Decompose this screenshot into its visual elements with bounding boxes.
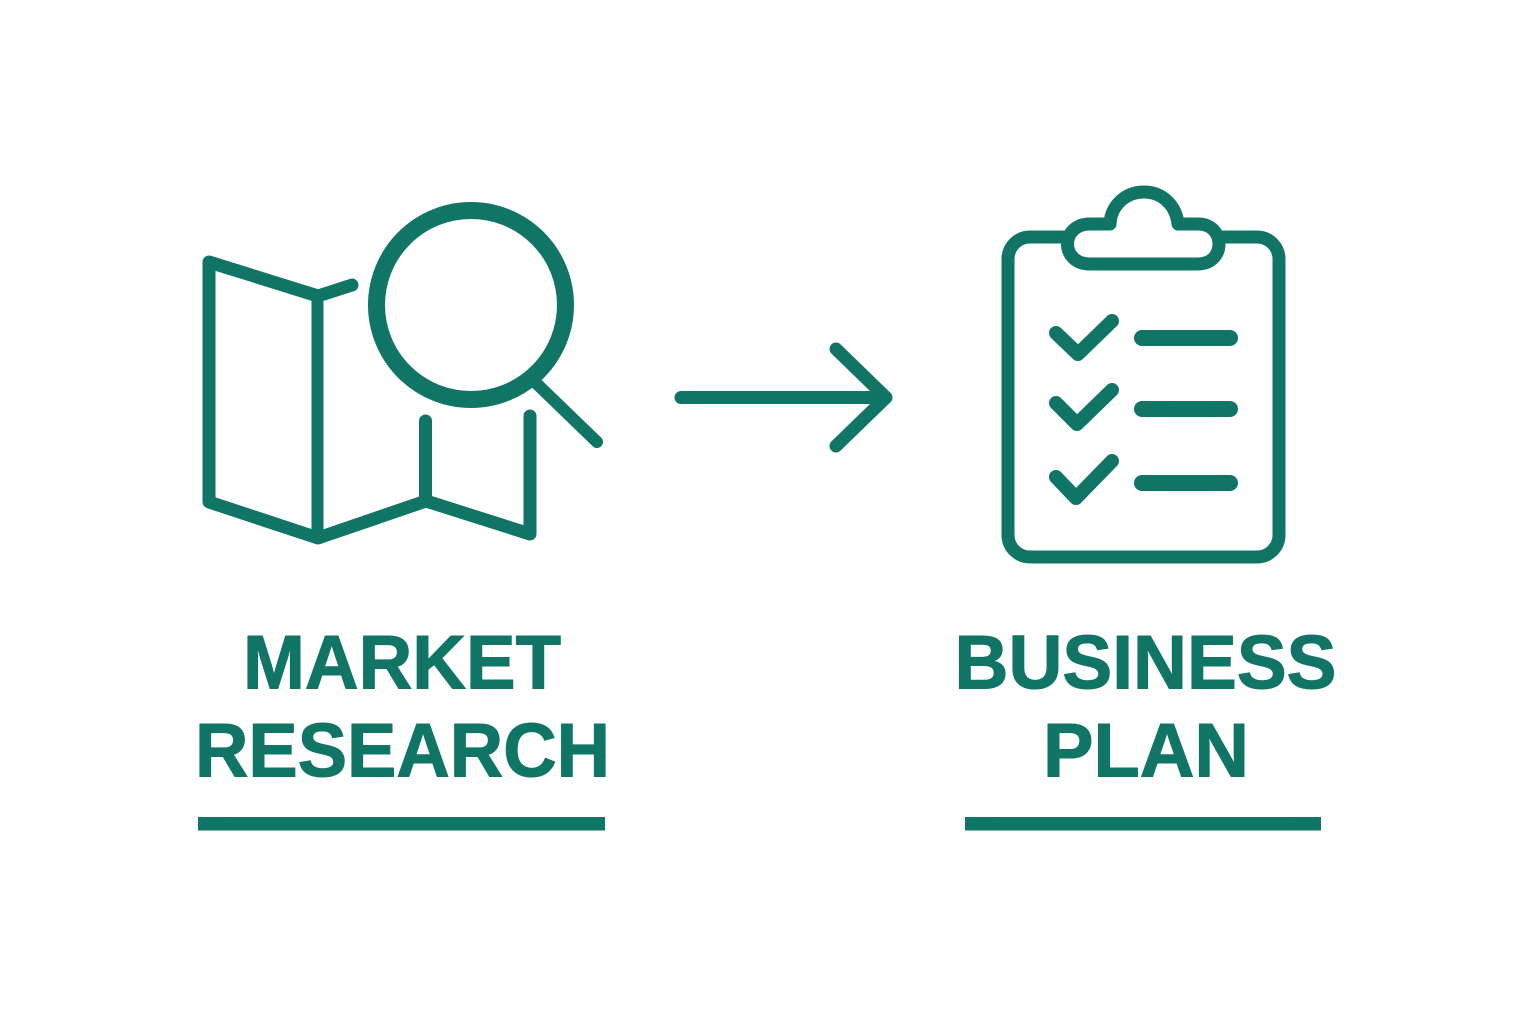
label: business plan: PLAN: [1043, 708, 1249, 794]
arrow: [681, 349, 886, 446]
label: market research: MARKET: [243, 620, 561, 706]
label: market research: RESEARCH: [195, 708, 610, 794]
label: business plan: BUSINESS: [954, 620, 1336, 706]
line row 3: [1142, 475, 1230, 491]
check row 1: [1056, 321, 1112, 354]
icon: clipboard checklist: [1008, 192, 1279, 557]
check row 2: [1056, 390, 1112, 424]
underline: business plan: [965, 817, 1321, 830]
label: market research: [195, 620, 610, 794]
line row 2: [1142, 401, 1230, 417]
line row 1: [1142, 330, 1230, 346]
underline: market research: [198, 817, 605, 830]
check row 3: [1056, 461, 1112, 498]
icon: map with magnifying glass: [209, 210, 597, 538]
label: business plan: [954, 620, 1336, 794]
